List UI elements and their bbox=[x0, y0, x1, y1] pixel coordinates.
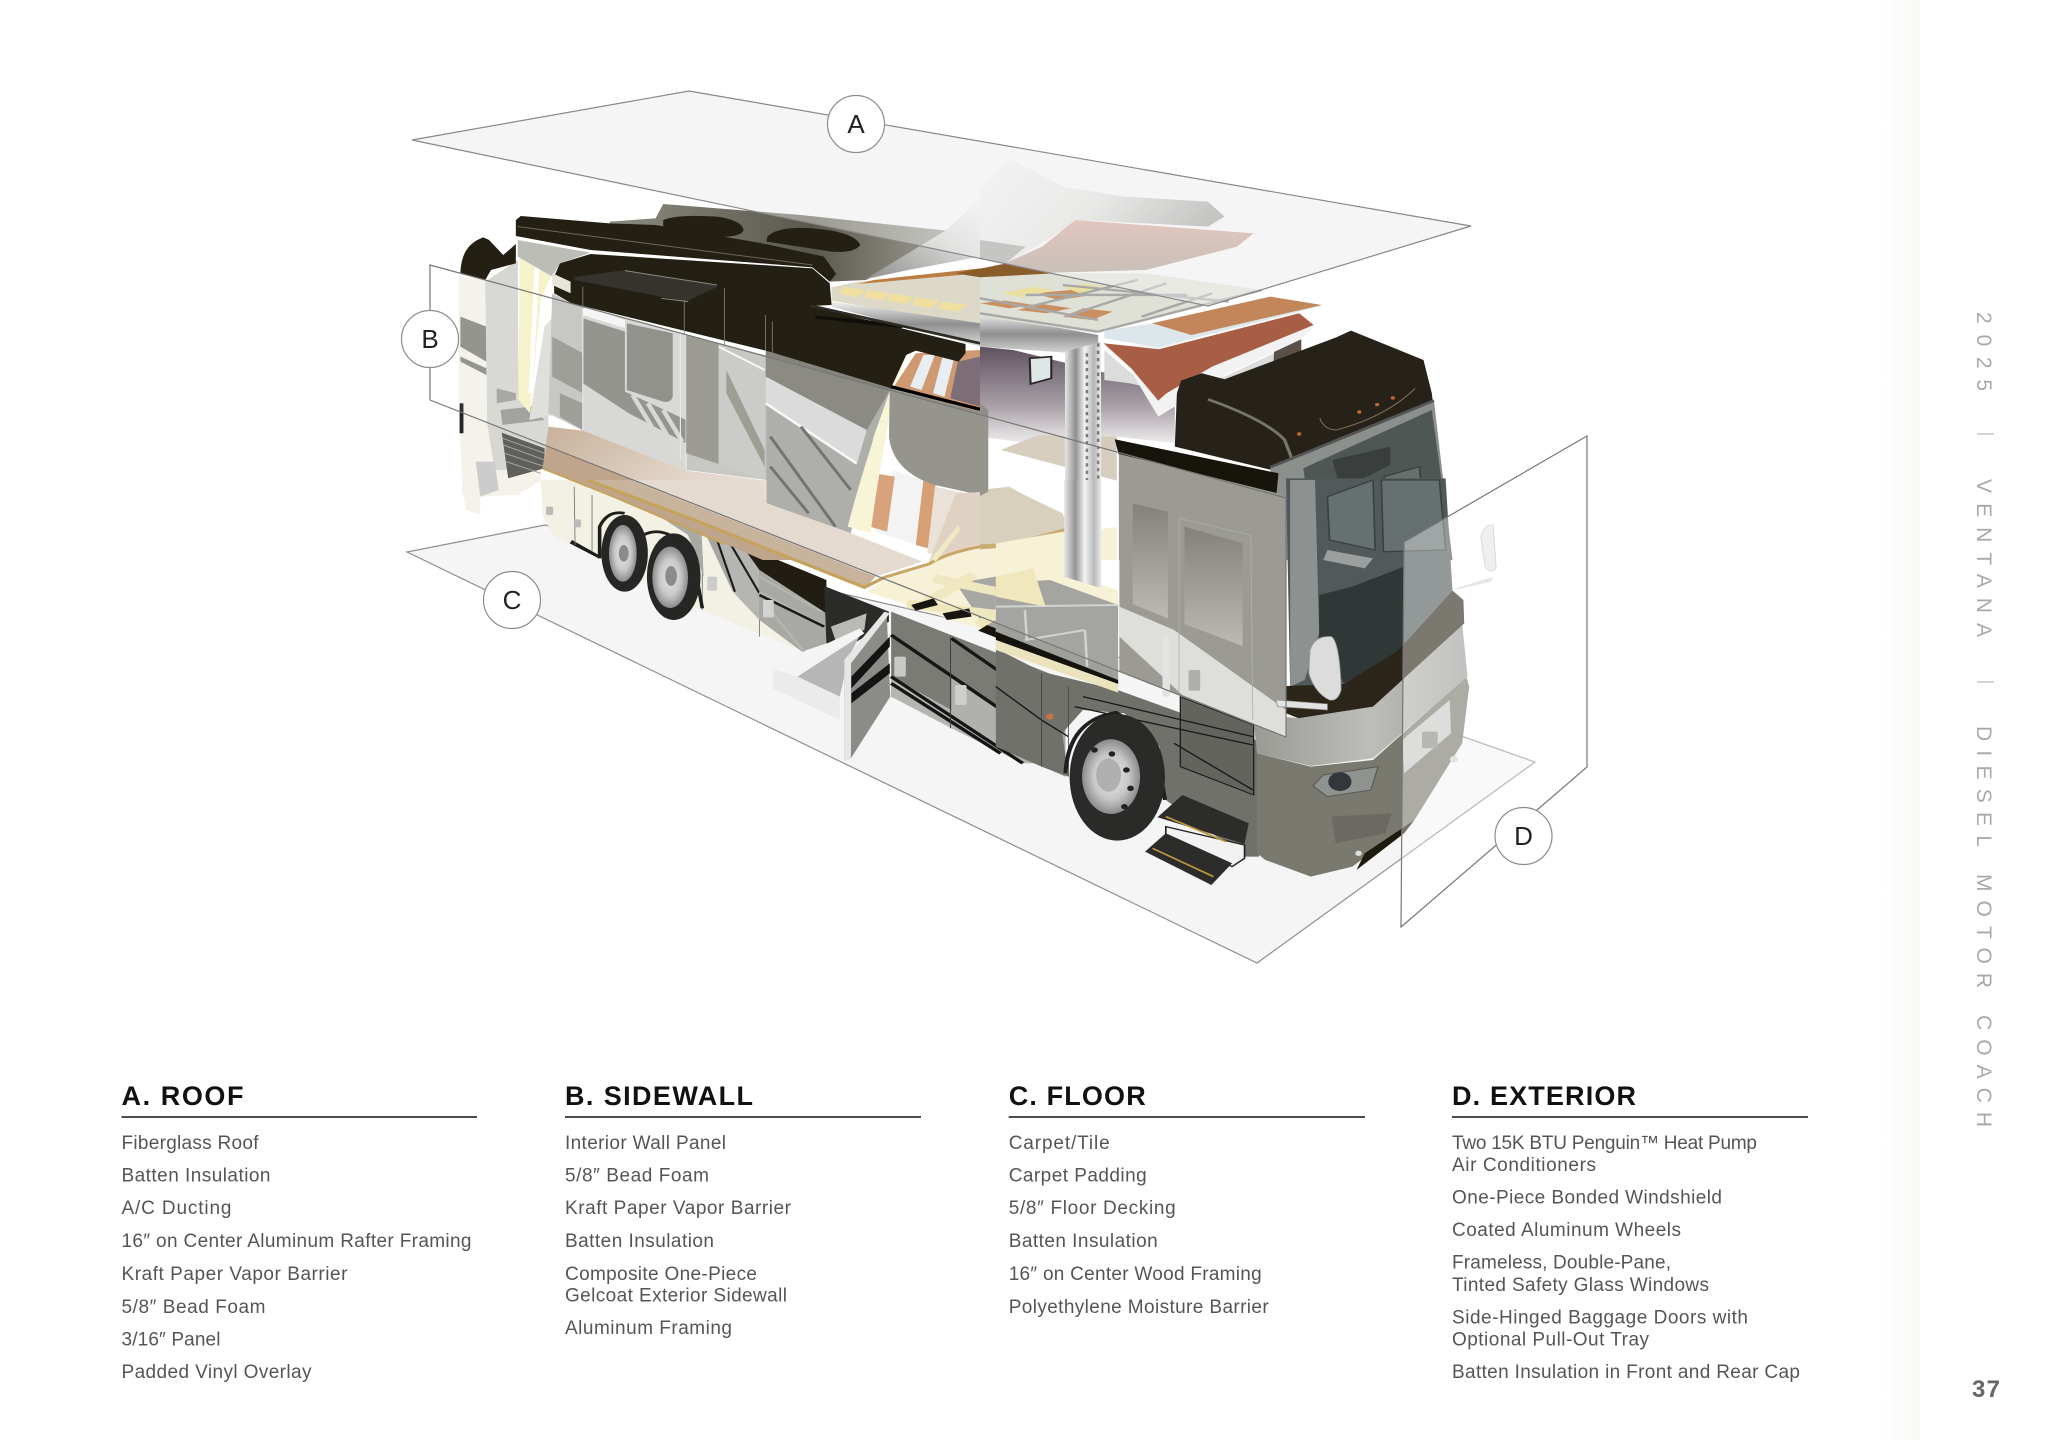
sidewall items: Kraft Paper Vapor Barrier bbox=[565, 1198, 792, 1219]
coach lower body, rear to mid bbox=[541, 480, 1065, 777]
silver body band bbox=[1253, 623, 1468, 766]
heading: roof: A. ROOF bbox=[122, 1081, 244, 1111]
vertical running title: DIESEL bbox=[1972, 726, 1995, 847]
roof slab behind air conditioners bbox=[610, 204, 946, 282]
mid wall base bbox=[548, 293, 767, 480]
tan floor edge band bbox=[590, 480, 876, 587]
roof items bbox=[122, 1133, 472, 1383]
silver cross beam bbox=[980, 313, 1098, 355]
slide-out topper two bbox=[814, 316, 902, 328]
tile behind wall bbox=[929, 490, 1063, 562]
marker A: A bbox=[847, 109, 865, 139]
rear cap shell bbox=[458, 277, 541, 515]
sidewall items: Gelcoat Exterior Sidewall bbox=[565, 1286, 787, 1306]
floor items bbox=[1009, 1133, 1269, 1318]
roof items: A/C Ducting bbox=[122, 1198, 232, 1219]
rear cap and mid-coach walls bbox=[458, 198, 980, 560]
vertical running title: VENTANA bbox=[1972, 479, 1995, 637]
sidewall items: Composite One-Piece bbox=[565, 1264, 757, 1285]
floor items: Polyethylene Moisture Barrier bbox=[1009, 1297, 1269, 1318]
front lower fascia bbox=[1257, 677, 1469, 877]
roof items: Batten Insulation bbox=[122, 1166, 270, 1186]
marker D bbox=[1495, 808, 1552, 864]
plane A: roof bbox=[412, 91, 1471, 306]
exterior items: Side-Hinged Baggage Doors with bbox=[1452, 1308, 1748, 1328]
fiberglass sheet, forward part bbox=[980, 158, 1225, 264]
sidewall items: Aluminum Framing bbox=[565, 1318, 732, 1339]
cream subfloor bbox=[867, 528, 1080, 672]
sidewall items: Interior Wall Panel bbox=[565, 1133, 726, 1154]
marker B: B bbox=[421, 324, 439, 354]
roof items: Padded Vinyl Overlay bbox=[122, 1362, 312, 1383]
black floor gaps bbox=[911, 598, 1080, 670]
timber lattice bbox=[907, 575, 1045, 625]
air conditioner shrouds bbox=[663, 216, 860, 252]
pull-out tray and hinged door bbox=[773, 612, 890, 761]
exterior items: Air Conditioners bbox=[1452, 1155, 1596, 1176]
sidewall items: 5/8″ Bead Foam bbox=[565, 1166, 709, 1186]
exterior items: Optional Pull-Out Tray bbox=[1452, 1330, 1650, 1350]
vertical running title: COACH bbox=[1972, 1015, 1995, 1127]
plane D: exterior bbox=[1401, 436, 1587, 927]
slide-out topper one bbox=[573, 270, 719, 302]
rear lounge floor bbox=[1001, 435, 1117, 481]
rear cross-section panel bbox=[485, 260, 548, 470]
front section of coach bbox=[996, 478, 1496, 885]
forward baggage panels bbox=[891, 612, 1065, 777]
marker D: D bbox=[1514, 821, 1533, 851]
marker B bbox=[402, 310, 458, 368]
roof framing edge, rear part bbox=[812, 268, 980, 347]
roof items: 16″ on Center Aluminum Rafter Framing bbox=[122, 1231, 472, 1252]
panel: floor list bbox=[1009, 1081, 1365, 1318]
chrome mirror, near side bbox=[1276, 636, 1341, 710]
floor framing cells bbox=[996, 532, 1118, 684]
sidewall items bbox=[565, 1133, 792, 1339]
dark upper sidewall bbox=[554, 254, 966, 388]
heading: exterior: D. EXTERIOR bbox=[1452, 1081, 1636, 1111]
open baggage bay bbox=[824, 586, 889, 647]
vertical running title: MOTOR bbox=[1972, 874, 1995, 988]
interior studs and curved wall bbox=[848, 350, 980, 560]
roof items: 3/16″ Panel bbox=[122, 1330, 220, 1350]
floor items: 5/8″ Floor Decking bbox=[1009, 1198, 1176, 1219]
page number: 37 bbox=[1972, 1376, 2000, 1403]
floor tile bbox=[543, 427, 889, 560]
plane C: floor bbox=[407, 525, 1535, 963]
overhead cabinet bbox=[889, 388, 980, 495]
roof rail bbox=[516, 216, 836, 282]
illustration: motor coach cutaway bbox=[458, 158, 1496, 885]
door top bar bbox=[1115, 439, 1278, 495]
door panel bbox=[1119, 480, 1286, 737]
slide-out wall one bbox=[583, 287, 724, 471]
windshield upper bbox=[1270, 400, 1453, 560]
roof layers and interior, forward part bbox=[955, 158, 1453, 560]
panel: sidewall list bbox=[565, 1081, 921, 1339]
door panel top bbox=[1119, 454, 1285, 560]
exterior items: One-Piece Bonded Windshield bbox=[1452, 1188, 1722, 1208]
rear tandem wheels bbox=[600, 513, 702, 620]
slide-out wall two bbox=[766, 351, 891, 533]
floor tile and timber lattice, mid section bbox=[588, 480, 1080, 672]
heading: floor: C. FLOOR bbox=[1009, 1081, 1146, 1111]
rear black cap bbox=[460, 237, 516, 280]
grey floor cells bbox=[956, 573, 1080, 662]
front wheel bbox=[1065, 713, 1165, 841]
vertical running title: 2025 bbox=[1972, 312, 1995, 391]
wall cabinet picture bbox=[1030, 357, 1051, 384]
mirror, far side bbox=[1456, 525, 1496, 589]
rafter framing bbox=[980, 273, 1262, 333]
floor items: Carpet/Tile bbox=[1009, 1133, 1110, 1154]
wood post at stud wall bbox=[931, 525, 960, 562]
floor items: Carpet Padding bbox=[1009, 1166, 1147, 1186]
aluminum stud column bbox=[1065, 342, 1101, 560]
panel: roof list bbox=[122, 1081, 477, 1383]
headlight bbox=[1313, 767, 1378, 797]
entry door lower bbox=[1180, 697, 1254, 795]
plane B: sidewall bbox=[430, 265, 1286, 737]
gold floor edge bbox=[588, 480, 1063, 587]
marker C bbox=[484, 572, 540, 628]
exterior items: Tinted Safety Glass Windows bbox=[1452, 1275, 1709, 1296]
floor items: Batten Insulation bbox=[1009, 1231, 1158, 1252]
exterior items bbox=[1452, 1133, 1800, 1383]
exterior items: Frameless, Double-Pane, bbox=[1452, 1252, 1671, 1274]
floor items: 16″ on Center Wood Framing bbox=[1009, 1264, 1262, 1285]
front roof cap bbox=[1175, 331, 1433, 472]
exterior items: Batten Insulation in Front and Rear Cap bbox=[1452, 1362, 1800, 1383]
sidewall items: Batten Insulation bbox=[565, 1231, 714, 1252]
roof items: 5/8″ Bead Foam bbox=[122, 1297, 266, 1318]
marker A bbox=[828, 96, 884, 152]
marker C: C bbox=[503, 585, 521, 615]
roof items: Fiberglass Roof bbox=[122, 1133, 259, 1154]
exterior items: Coated Aluminum Wheels bbox=[1452, 1220, 1681, 1241]
sidebar band bbox=[1884, 0, 1920, 1440]
roof items: Kraft Paper Vapor Barrier bbox=[122, 1264, 348, 1285]
heading: sidewall: B. SIDEWALL bbox=[565, 1081, 753, 1111]
windshield bbox=[1286, 478, 1453, 688]
interior back wall bbox=[980, 347, 1175, 453]
brown mask bbox=[1286, 591, 1464, 718]
wall section between slides bbox=[719, 347, 765, 480]
vapor barrier and insulation layers bbox=[1104, 297, 1322, 417]
entry steps bbox=[1145, 795, 1249, 885]
tile floor under slide two bbox=[630, 480, 922, 577]
door cabinet edge bbox=[980, 403, 988, 496]
lower body bbox=[996, 648, 1259, 857]
vent grilles bbox=[497, 388, 545, 478]
exterior items: Two 15K BTU Penguin™ Heat Pump bbox=[1452, 1133, 1757, 1154]
window wall seen through cut bbox=[1104, 340, 1301, 397]
kraft vapor sheet bbox=[968, 220, 1254, 273]
fiberglass sheet, rear part bbox=[865, 198, 980, 279]
panel: exterior list bbox=[1452, 1081, 1808, 1383]
vertical running title bbox=[1972, 312, 1995, 1127]
